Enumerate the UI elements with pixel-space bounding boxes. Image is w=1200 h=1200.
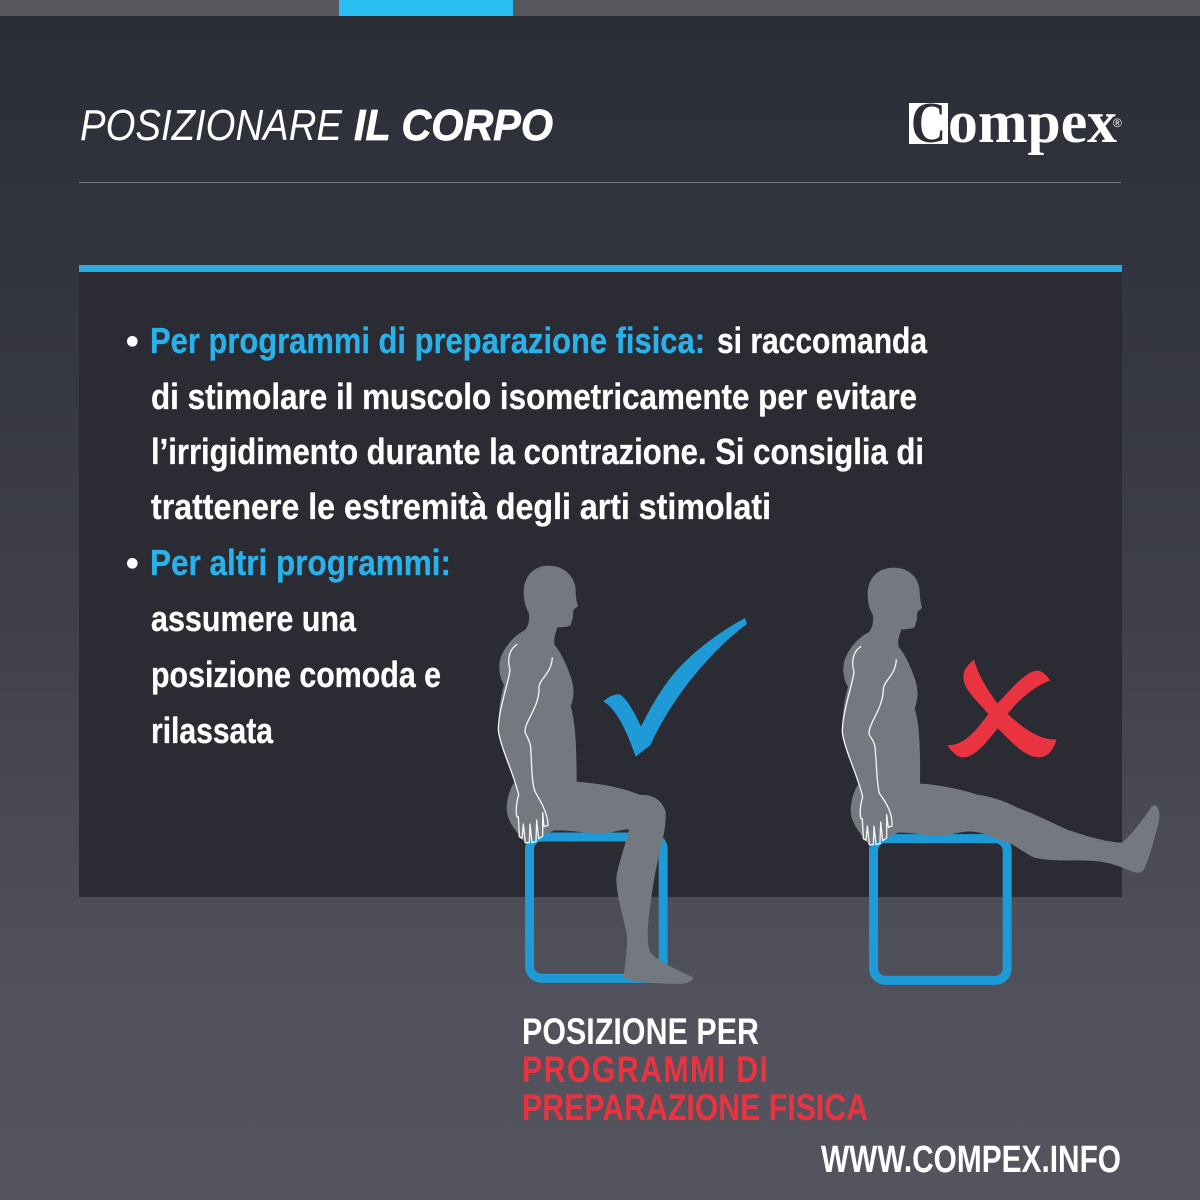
icon: correct position figure on box: [498, 566, 693, 984]
text block: altri programmi: Per altri programmi:: [150, 542, 451, 583]
text block: altri programmi: posizione comoda e: [151, 654, 441, 695]
text block: altri programmi: rilassata: [151, 710, 274, 751]
title: IL CORPO: [354, 101, 553, 150]
icon: incorrect position figure on box: [842, 568, 1159, 980]
caption: PREPARAZIONE FISICA: [522, 1087, 868, 1129]
caption: [522, 1011, 868, 1129]
text block: preparazione fisica: Per programmi di preparazione fisica:: [150, 320, 705, 361]
text block: preparazione fisica: •: [126, 320, 139, 361]
text block: preparazione fisica: [126, 320, 928, 527]
text block: preparazione fisica: l’irrigidimento durante la contrazione. Si consiglia di: [151, 431, 924, 472]
text block: altri programmi: •: [126, 542, 139, 583]
text block: preparazione fisica: trattenere le estremità degli arti stimolati: [151, 486, 771, 527]
website: WWW.COMPEX.INFO: [821, 1139, 1121, 1181]
text block: altri programmi: assumere una: [151, 598, 357, 639]
logo: Compex: ®: [1113, 116, 1122, 130]
caption: POSIZIONE PER: [522, 1011, 759, 1053]
panel: text background: [79, 265, 1122, 897]
icon: red cross: [947, 659, 1057, 757]
icon: blue check mark: [603, 618, 747, 757]
logo: Compex: C: [911, 90, 946, 155]
text block: preparazione fisica: si raccomanda: [717, 320, 928, 361]
text block: preparazione fisica: di stimolare il muscolo isometricamente per evitare: [151, 376, 917, 417]
top progress bar: [0, 0, 1200, 16]
text block: altri programmi: [126, 542, 451, 751]
caption: PROGRAMMI DI: [522, 1049, 768, 1091]
header divider: [79, 182, 1121, 183]
logo: Compex: ompex: [948, 89, 1117, 155]
title: POSIZIONARE: [80, 101, 343, 150]
